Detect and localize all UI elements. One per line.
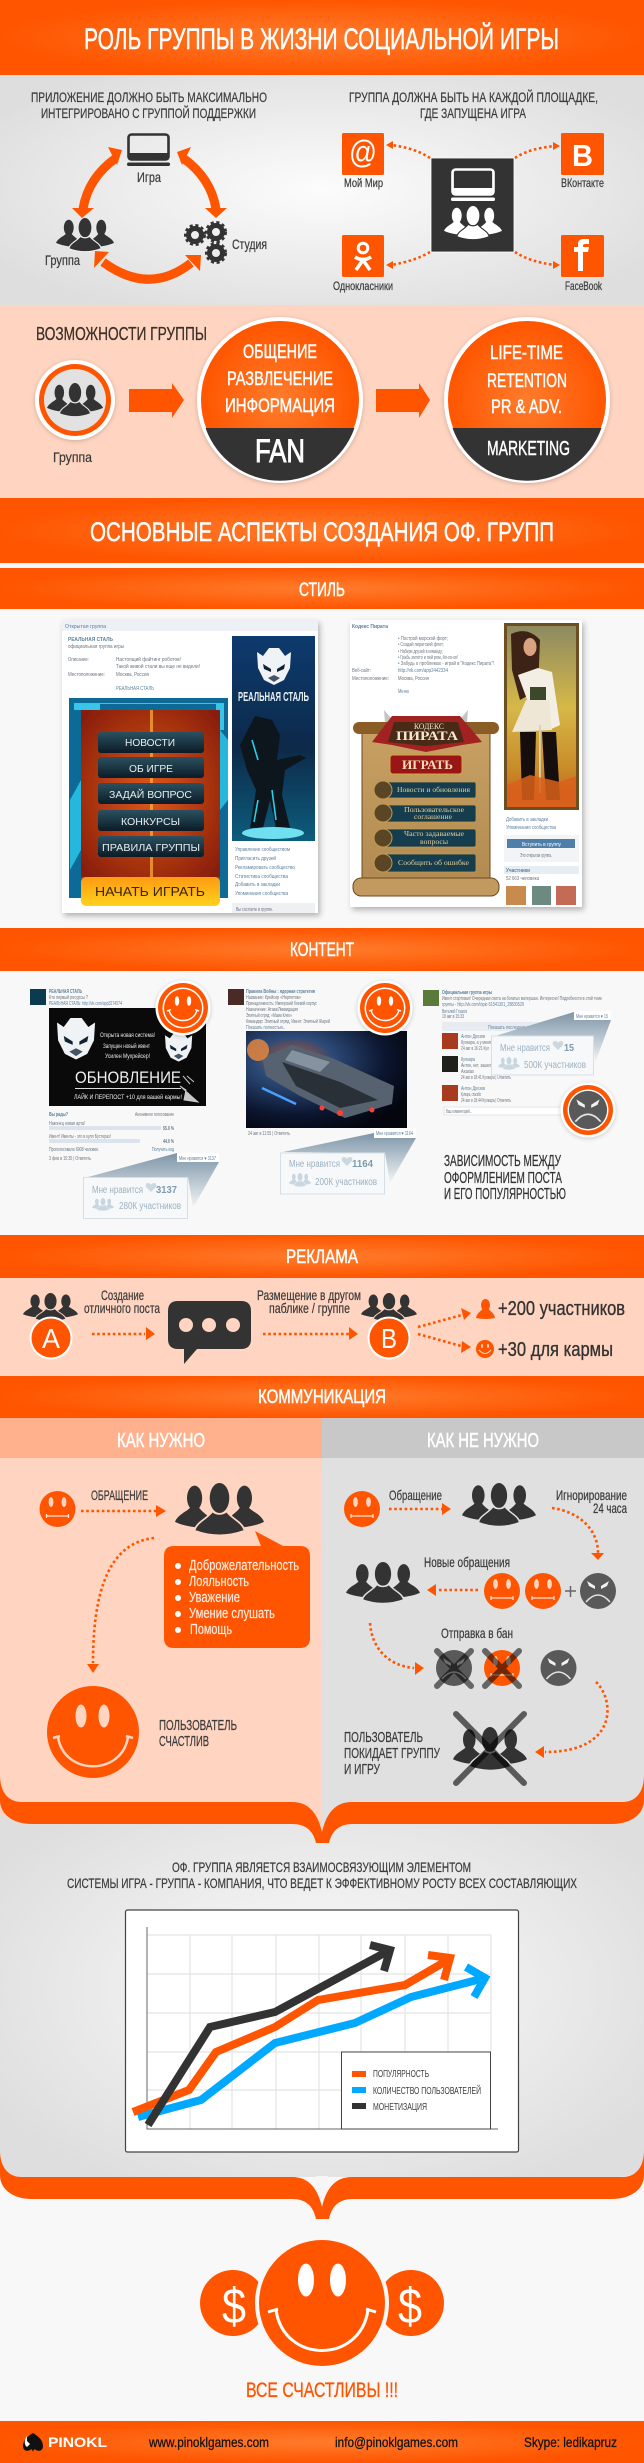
callout: good qualities: Умение слушать xyxy=(189,1605,275,1622)
step label: Создание xyxy=(101,1287,144,1303)
series: monetization xyxy=(148,1945,390,2125)
logo xyxy=(23,2433,107,2452)
panel: group capabilities xyxy=(0,305,644,498)
screenshot: real steel group: Вы состоите в группе. xyxy=(236,907,273,913)
group A: A xyxy=(42,1323,60,1354)
post 1: Проголосовало 6908 человек. xyxy=(49,1147,99,1153)
icon: happy face with coins: $ xyxy=(398,2278,422,2334)
screenshot: real steel group: Настоящий файтинг роботов! xyxy=(116,656,181,663)
circle: marketing: RETENTION xyxy=(487,371,567,392)
community sidebar: 52 663 человека xyxy=(506,876,539,882)
smile badge 1 xyxy=(156,980,210,1036)
icon: game monitor xyxy=(127,134,170,166)
label: Группа xyxy=(53,449,92,465)
group links: Добавить в закладки xyxy=(235,882,280,888)
banner: communication: КОММУНИКАЦИЯ xyxy=(258,1387,386,1408)
dotted arrow xyxy=(389,1503,451,1515)
like callout 2 xyxy=(280,1128,416,1194)
cycle arrows xyxy=(72,147,227,279)
smile badge 2 xyxy=(358,980,412,1036)
step label: Размещение в другом xyxy=(257,1287,361,1303)
screenshot: real steel group: Описание: xyxy=(68,657,89,663)
post 3: Кулкара, спасибо xyxy=(461,1092,481,1098)
group circle xyxy=(35,360,115,440)
legend xyxy=(342,2052,490,2129)
screenshot: real steel group: Москва, Россия xyxy=(116,672,149,678)
panel: content examples xyxy=(30,980,616,1218)
post 1: Получить код xyxy=(152,1147,174,1153)
panel: integration diagrams xyxy=(0,75,644,305)
post 2: Показать полностью.. xyxy=(246,1025,285,1031)
icon: odnoklassniki xyxy=(342,235,384,277)
group links: Пригласить друзей xyxy=(235,855,276,862)
post 1: ОБНОВЛЕНИЕ xyxy=(75,1068,181,1087)
heading: ВОЗМОЖНОСТИ ГРУППЫ xyxy=(36,324,207,344)
icon: person xyxy=(476,1299,495,1319)
community sidebar xyxy=(504,817,579,905)
post 3: Официальная группа игры xyxy=(442,989,492,996)
callout: good qualities: Доброжелательность xyxy=(189,1557,299,1574)
icon: moi mir xyxy=(342,133,384,175)
arrow xyxy=(376,383,430,418)
face: neutral xyxy=(40,1491,76,1527)
post 1: Кто первый ресурсы ? xyxy=(49,994,88,1001)
label: user happy: СЧАСТЛИВ xyxy=(159,1733,209,1750)
header banner xyxy=(0,0,644,75)
screenshot: pirate code group: Веб-сайт: xyxy=(352,667,371,674)
everyone happy label: ВСЕ СЧАСТЛИВЫ !!! xyxy=(246,2379,398,2402)
post 1: Анонимное голосование xyxy=(135,1112,174,1118)
conclusion text: И ЕГО ПОПУЛЯРНОСТЬЮ xyxy=(444,1186,566,1203)
screenshot: pirate code group: Кодекс Пирата xyxy=(352,624,388,630)
step label: паблике / группе xyxy=(269,1300,350,1316)
like callout 2: 200К участников xyxy=(315,1177,377,1188)
brace: summary xyxy=(0,2150,644,2219)
like callout 3: Мне нравится xyxy=(500,1043,550,1054)
game menu: НАЧАТЬ ИГРАТЬ xyxy=(95,884,205,899)
left heading: ПРИЛОЖЕНИЕ ДОЛЖНО БЫТЬ МАКСИМАЛЬНО xyxy=(31,89,267,105)
notch under gray panel xyxy=(316,2176,328,2209)
group A xyxy=(23,1293,78,1360)
screenshot: pirate code group xyxy=(350,620,582,907)
column header xyxy=(322,1418,644,1458)
group links: Рекламировать сообщество xyxy=(235,865,295,871)
panel: style screenshots xyxy=(62,620,582,913)
post 3: Антон, нет, зашел xyxy=(461,1063,491,1069)
platform labels: Мой Мир xyxy=(344,176,383,190)
icon: vkontakte xyxy=(561,133,604,175)
banner: style: СТИЛЬ xyxy=(299,580,345,601)
label: request: Обращение xyxy=(389,1487,442,1503)
post 2: Командир: Элитный отряд, Ивент: Элитный Жарей xyxy=(246,1018,330,1025)
scroll menu: вопросы xyxy=(420,838,448,846)
post 1: Усилен Мухрейсер! xyxy=(105,1052,150,1060)
icon: group xyxy=(346,1562,420,1603)
series: users xyxy=(138,1967,485,2117)
post 1: 55.0 % xyxy=(163,1126,174,1132)
community sidebar: Вступить в группу xyxy=(522,842,561,848)
screenshot: pirate code group: • Грабь золото и пей ром, йо-хо-хо! xyxy=(398,654,458,661)
like callout 1 xyxy=(84,1153,219,1218)
post 2: Элитный отряд: «Мама Клео» xyxy=(246,1012,292,1019)
callout: good qualities: Уважение xyxy=(189,1589,240,1606)
scroll menu: Сообщить об ошибке xyxy=(398,859,469,867)
pirate banner xyxy=(504,623,579,810)
banner: main aspects xyxy=(0,498,644,563)
screenshot: pirate code group: • Создай пиратский флот; xyxy=(398,641,444,648)
screenshot: pirate code group: • Набери друзей в команду; xyxy=(398,648,443,655)
screenshot: real steel group: официальная группа игры xyxy=(68,644,124,650)
icon: smile xyxy=(476,1340,494,1358)
screenshot: pirate code group: • Забудь о проблемах - играй в "Кодекс Пирата"! xyxy=(398,660,494,667)
post 1: Открыта новая система! xyxy=(100,1032,155,1039)
post 2: Правила Войны : ядерная стратегия xyxy=(246,988,315,995)
scroll menu: Пользовательское xyxy=(404,806,464,814)
like callout 1: 280К участников xyxy=(119,1201,181,1212)
like callout 1: Мне нравится ♥ 3137 xyxy=(179,1156,216,1162)
dotted arrow xyxy=(370,1623,424,1675)
panel: how to do it xyxy=(0,1418,322,1833)
icon: happy face with coins xyxy=(200,2236,444,2370)
post 1: ЛАЙК И ПЕРЕПОСТ +10 для вашей кармы! xyxy=(74,1092,182,1101)
screenshot: real steel group: Такой живой стали вы еще не видели! xyxy=(116,663,200,670)
circle: fan: РАЗВЛЕЧЕНИЕ xyxy=(227,369,333,390)
post 1 xyxy=(30,989,206,1162)
icon: happy face with coins: $ xyxy=(222,2278,246,2334)
banner: communication xyxy=(0,1376,644,1418)
fork arrows xyxy=(418,1308,471,1353)
group links: Упоминания сообщества xyxy=(235,891,288,897)
game menu: ОБ ИГРЕ xyxy=(129,764,173,775)
like callout 2: Мне нравится xyxy=(289,1159,340,1170)
post 1: Ивент! Ивенты - это в кулл Бустерах! xyxy=(49,1134,111,1140)
robot banner xyxy=(232,636,315,841)
icon: speech bubble xyxy=(168,1301,251,1364)
face: happy xyxy=(47,1686,139,1778)
like callout 3: 15 xyxy=(564,1043,574,1054)
dotted arrow xyxy=(263,1327,358,1340)
dotted arrow xyxy=(87,1538,154,1673)
icon: vkontakte: В xyxy=(572,138,593,173)
scroll menu: Часто задаваемые xyxy=(404,830,464,838)
like callout 3: 500К участников xyxy=(524,1060,586,1071)
game menu: КОНКУРСЫ xyxy=(121,817,180,828)
community sidebar: Добавить в закладки xyxy=(506,817,548,823)
post 1: Запущен новый ивент xyxy=(103,1042,150,1050)
post 3 xyxy=(423,989,602,1115)
sad badge xyxy=(560,1082,616,1138)
callout: good qualities: Помощь xyxy=(190,1621,232,1638)
screenshot: pirate code group: Меню xyxy=(398,689,409,695)
banner: content: КОНТЕНТ xyxy=(290,940,354,961)
scroll menu: ИГРАТЬ xyxy=(402,757,453,772)
screenshot: real steel group: Открытая группа xyxy=(65,624,106,630)
community sidebar: Упоминания сообщества xyxy=(506,825,556,831)
face: neutral xyxy=(344,1491,380,1527)
dotted arrow xyxy=(81,1505,166,1517)
like callout 1: Мне нравится xyxy=(92,1185,143,1196)
step label xyxy=(84,1287,160,1316)
dotted arrow xyxy=(552,1508,604,1560)
post 2: Принадлежность: Имперский боевой корпус xyxy=(246,1000,317,1007)
like callout 2: Мне нравится ♥ 1164 xyxy=(376,1131,413,1137)
footer contacts: Skype: ledikapruz xyxy=(524,2434,617,2450)
post 2: 24 авг в 11:55 | Ответить xyxy=(248,1131,290,1137)
platform hub xyxy=(431,158,514,252)
label: user leaves: ПОЛЬЗОВАТЕЛЬ xyxy=(344,1729,423,1746)
platform labels xyxy=(333,176,604,293)
group links xyxy=(235,847,295,897)
screenshot: pirate code group: Местоположение: xyxy=(352,676,389,682)
circle: marketing: PR & ADV. xyxy=(491,397,562,418)
footer contacts: www.pinoklgames.com xyxy=(148,2434,269,2450)
icon: gears xyxy=(186,222,226,262)
circle: fan: FAN xyxy=(255,433,305,469)
conclusion text xyxy=(444,1153,566,1203)
dotted arrow xyxy=(427,1584,478,1596)
dotted arrows xyxy=(386,141,560,269)
banner: content xyxy=(0,928,644,971)
post 1: 44.0 % xyxy=(163,1139,174,1145)
robot banner: РЕАЛЬНАЯ СТАЛЬ xyxy=(238,689,309,704)
scroll menu xyxy=(353,710,499,896)
circle: marketing: MARKETING xyxy=(487,438,570,460)
right heading xyxy=(349,88,598,121)
legend: КОЛИЧЕСТВО ПОЛЬЗОВАТЕЛЕЙ xyxy=(373,2084,481,2097)
platform labels: ВКонтакте xyxy=(561,176,604,190)
faces row xyxy=(484,1573,616,1609)
circle: marketing xyxy=(444,317,610,483)
label: new requests: Новые обращения xyxy=(424,1554,510,1570)
post 1: Вы рады? xyxy=(49,1112,68,1118)
label: user leaves: И ИГРУ xyxy=(344,1761,380,1778)
post 3: Показать последние комментарии из 206 xyxy=(488,1025,564,1031)
label: user happy: ПОЛЬЗОВАТЕЛЬ xyxy=(159,1717,237,1734)
post 3: Антон Дрозов xyxy=(461,1086,485,1092)
platform labels: Однокласники xyxy=(333,279,393,293)
label: ignoring: 24 часа xyxy=(593,1500,627,1516)
left heading: ИНТЕГРИРОВАНО С ГРУППОЙ ПОДДЕРЖКИ xyxy=(41,104,256,121)
label: ban: Отправка в бан xyxy=(441,1625,513,1641)
scroll menu: соглашение xyxy=(414,813,452,821)
brace: communication xyxy=(0,1775,644,1843)
screenshot: pirate code group: • Построй морской форт; xyxy=(398,635,448,642)
legend: МОНЕТИЗАЦИЯ xyxy=(373,2102,427,2113)
post 3: Кулкара, а у меня xyxy=(461,1040,491,1046)
conclusion text: ЗАВИСИМОСТЬ МЕЖДУ xyxy=(444,1153,562,1170)
group B xyxy=(361,1293,417,1360)
step label: отличного поста xyxy=(84,1300,160,1316)
footer xyxy=(0,2421,644,2463)
community sidebar: Участники xyxy=(506,868,530,874)
icon: crossed group xyxy=(453,1714,527,1783)
icon: group xyxy=(462,1483,536,1526)
panel: how not to do it xyxy=(322,1418,644,1833)
icon: group xyxy=(175,1483,264,1535)
group links: Управление сообществом xyxy=(235,847,290,853)
logo: PINOKL xyxy=(48,2434,107,2450)
scroll menu: ПИРАТА xyxy=(396,728,459,743)
post 1: Наконец новая арта! xyxy=(49,1121,85,1127)
banner: advertising: РЕКЛАМА xyxy=(286,1247,358,1268)
group links: Статистика сообщества xyxy=(235,874,288,880)
label: ignoring xyxy=(556,1487,627,1516)
post 1: 3 фев в 15:35 | Ответить xyxy=(49,1156,91,1162)
game menu: НОВОСТИ xyxy=(125,738,175,749)
dotted arrow xyxy=(92,1327,155,1340)
circle: fan: ИНФОРМАЦИЯ xyxy=(225,396,335,417)
post 3: 24 авг в 18:44 Кулкара | Ответить xyxy=(461,1098,511,1104)
post 3: Кулкара xyxy=(461,1057,475,1063)
circle: marketing: LIFE-TIME xyxy=(490,343,563,364)
callout: good qualities xyxy=(164,1531,310,1648)
heading: system growth xyxy=(67,1859,577,1891)
game menu: ЗАДАЙ ВОПРОС xyxy=(109,788,192,801)
series: popularity xyxy=(133,1955,450,2112)
label: user leaves xyxy=(344,1729,440,1778)
post 3: 24 авг в 16:21 Кул xyxy=(461,1046,489,1052)
legend: ПОПУЛЯРНОСТЬ xyxy=(373,2069,429,2080)
like callout 2: 1164 xyxy=(352,1159,373,1170)
post 2: Название: Крейсер «Нерпетов» xyxy=(246,994,301,1001)
post 2: Назначение: Атака/Ликвидация xyxy=(246,1007,298,1013)
platform labels: FaceBook xyxy=(565,279,603,293)
chart: growth lines xyxy=(126,1910,518,2152)
column header: КАК НУЖНО xyxy=(117,1430,205,1452)
post 3: 24 авг в 18:41 Кулкара | Ответить xyxy=(461,1075,511,1081)
conclusion text: ОФОРМЛЕНИЕМ ПОСТА xyxy=(444,1170,562,1187)
scroll menu: Новости и обновления xyxy=(397,786,471,794)
label: game: Игра xyxy=(137,169,161,185)
panel: advertising flow xyxy=(0,1278,644,1376)
community sidebar: Это открытая группа. xyxy=(520,853,552,859)
footer contacts xyxy=(148,2434,617,2450)
screenshot: real steel group xyxy=(62,620,318,913)
post 3: группы - http://vk.com/topic-51541301_28830529 xyxy=(442,1002,524,1008)
label: request: ОБРАЩЕНИЕ xyxy=(91,1487,148,1503)
label: user happy xyxy=(159,1717,237,1750)
like callout 1: 3137 xyxy=(156,1185,177,1196)
post 3: 19 авг в 15:33 xyxy=(442,1014,464,1020)
post 3: Ахахах xyxy=(461,1069,474,1075)
group B: B xyxy=(381,1323,397,1354)
scroll menu: КОДЕКС xyxy=(414,722,444,731)
game menu: ПРАВИЛА ГРУППЫ xyxy=(102,843,200,854)
label: user leaves: ПОКИДАЕТ ГРУППУ xyxy=(344,1745,440,1762)
label: studio: Студия xyxy=(232,236,267,252)
like callout 3: Мне нравится ♥ 15 xyxy=(576,1014,608,1020)
left heading xyxy=(31,89,267,121)
lower gray background xyxy=(0,1800,644,2177)
screenshot: real steel group: РЕАЛЬНАЯ СТАЛЬ xyxy=(116,686,155,692)
post 3: Ваш комментарий... xyxy=(446,1108,472,1115)
icon: facebook xyxy=(561,235,604,277)
screenshot: pirate code group: Москва, Россия xyxy=(398,676,429,682)
heading: system growth: ОФ. ГРУППА ЯВЛЯЕТСЯ ВЗАИМОСВЯЗУЮЩИМ ЭЛЕМЕНТОМ xyxy=(172,1859,471,1875)
callout: good qualities: Лояльность xyxy=(189,1573,249,1590)
arrow xyxy=(129,383,184,418)
icon: moi mir: @ xyxy=(349,134,377,170)
footer contacts: info@pinoklgames.com xyxy=(335,2434,458,2450)
banned faces xyxy=(436,1650,576,1686)
banner: advertising xyxy=(0,1235,644,1278)
circle: fan: ОБЩЕНИЕ xyxy=(243,342,317,363)
post 3: Антон Дрозов xyxy=(461,1034,485,1040)
banner: style xyxy=(0,568,644,609)
post 3: Виталий Глазов xyxy=(442,1008,467,1015)
like callout 3 xyxy=(492,1011,611,1075)
right heading: ГДЕ ЗАПУЩЕНА ИГРА xyxy=(420,105,526,121)
screenshot: pirate code group: http://vk.com/app2442334 xyxy=(398,668,448,674)
screenshot: real steel group: Местоположение: xyxy=(68,672,105,678)
icon: group xyxy=(56,218,114,252)
post 2 xyxy=(228,988,407,1137)
label: group: Группа xyxy=(45,252,80,268)
post 1: РЕАЛЬНАЯ СТАЛЬ: http://vk.com/app3274574 xyxy=(49,1001,122,1007)
circle: fan xyxy=(197,317,363,483)
game menu xyxy=(69,698,228,906)
result: karma: +30 для кармы xyxy=(498,1339,613,1361)
column header: КАК НЕ НУЖНО xyxy=(427,1430,539,1452)
dotted arrow xyxy=(535,1682,608,1758)
column header xyxy=(0,1418,322,1458)
step label xyxy=(257,1287,361,1316)
post 1: РЕАЛЬНАЯ СТАЛЬ xyxy=(49,989,82,995)
screenshot: real steel group: РЕАЛЬНАЯ СТАЛЬ xyxy=(68,637,113,643)
